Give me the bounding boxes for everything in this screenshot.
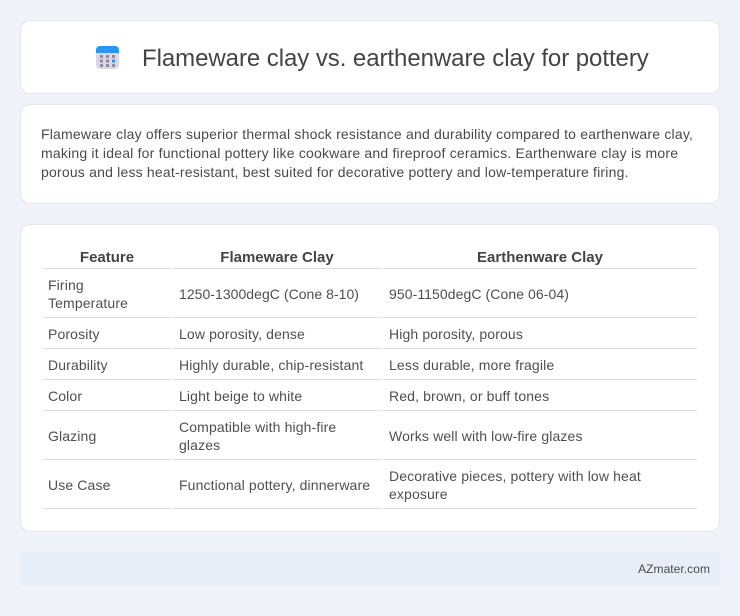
row: porosity: Porosity: [48, 326, 100, 342]
row: glazing: Compatible with high-fire: [179, 419, 336, 435]
panel: summary card: [20, 104, 720, 204]
panel: title card: [20, 20, 720, 94]
footer bar: [20, 552, 720, 586]
row: durability: Highly durable, chip-resistant: [179, 357, 363, 373]
row: porosity: High porosity, porous: [389, 326, 523, 342]
row: porosity: [48, 326, 523, 342]
row: durability: Less durable, more fragile: [389, 357, 554, 373]
row: firing temperature: Firing: [48, 277, 84, 293]
icon: calendar: [96, 46, 119, 69]
panel: comparison table card: [20, 224, 720, 532]
row: use case: Decorative pieces, pottery with low heat: [389, 468, 641, 484]
row: use case: Functional pottery, dinnerware: [179, 477, 370, 493]
header: Flameware Clay: Flameware Clay: [220, 249, 334, 266]
row: color: [48, 388, 549, 404]
row: color: Color: [48, 388, 82, 404]
header: Earthenware Clay: Earthenware Clay: [477, 249, 603, 266]
row: color: Red, brown, or buff tones: [389, 388, 549, 404]
footer credit: AZmater.com: [638, 562, 710, 576]
header: Feature: Feature: [80, 249, 134, 266]
summary text: Flameware clay offers superior thermal shock resistance and durability compared to earthenware clay,: [41, 126, 693, 142]
row: firing temperature: Temperature: [48, 295, 128, 311]
comparison table: [43, 249, 697, 509]
row: color: Light beige to white: [179, 388, 302, 404]
row: use case: exposure: [389, 486, 448, 502]
row: use case: [48, 468, 641, 502]
row: glazing: Glazing: [48, 428, 96, 444]
row: durability: Durability: [48, 357, 108, 373]
row: durability: [48, 357, 554, 373]
row: firing temperature: [48, 277, 569, 311]
summary text: [41, 126, 693, 180]
summary text: porous and less heat-resistant, best suited for decorative pottery and low-temperature firing.: [41, 164, 629, 180]
row: porosity: Low porosity, dense: [179, 326, 305, 342]
title: Flameware clay vs. earthenware clay for pottery: [142, 45, 649, 72]
summary text: making it ideal for functional pottery like cookware and fireproof ceramics. Earthenware clay is more: [41, 145, 678, 161]
row: firing temperature: 1250-1300degC (Cone 8-10): [179, 286, 359, 302]
row: glazing: glazes: [179, 437, 220, 453]
row: use case: Use Case: [48, 477, 111, 493]
row: firing temperature: 950-1150degC (Cone 06-04): [389, 286, 569, 302]
row: glazing: Works well with low-fire glazes: [389, 428, 583, 444]
row: glazing: [48, 419, 583, 453]
